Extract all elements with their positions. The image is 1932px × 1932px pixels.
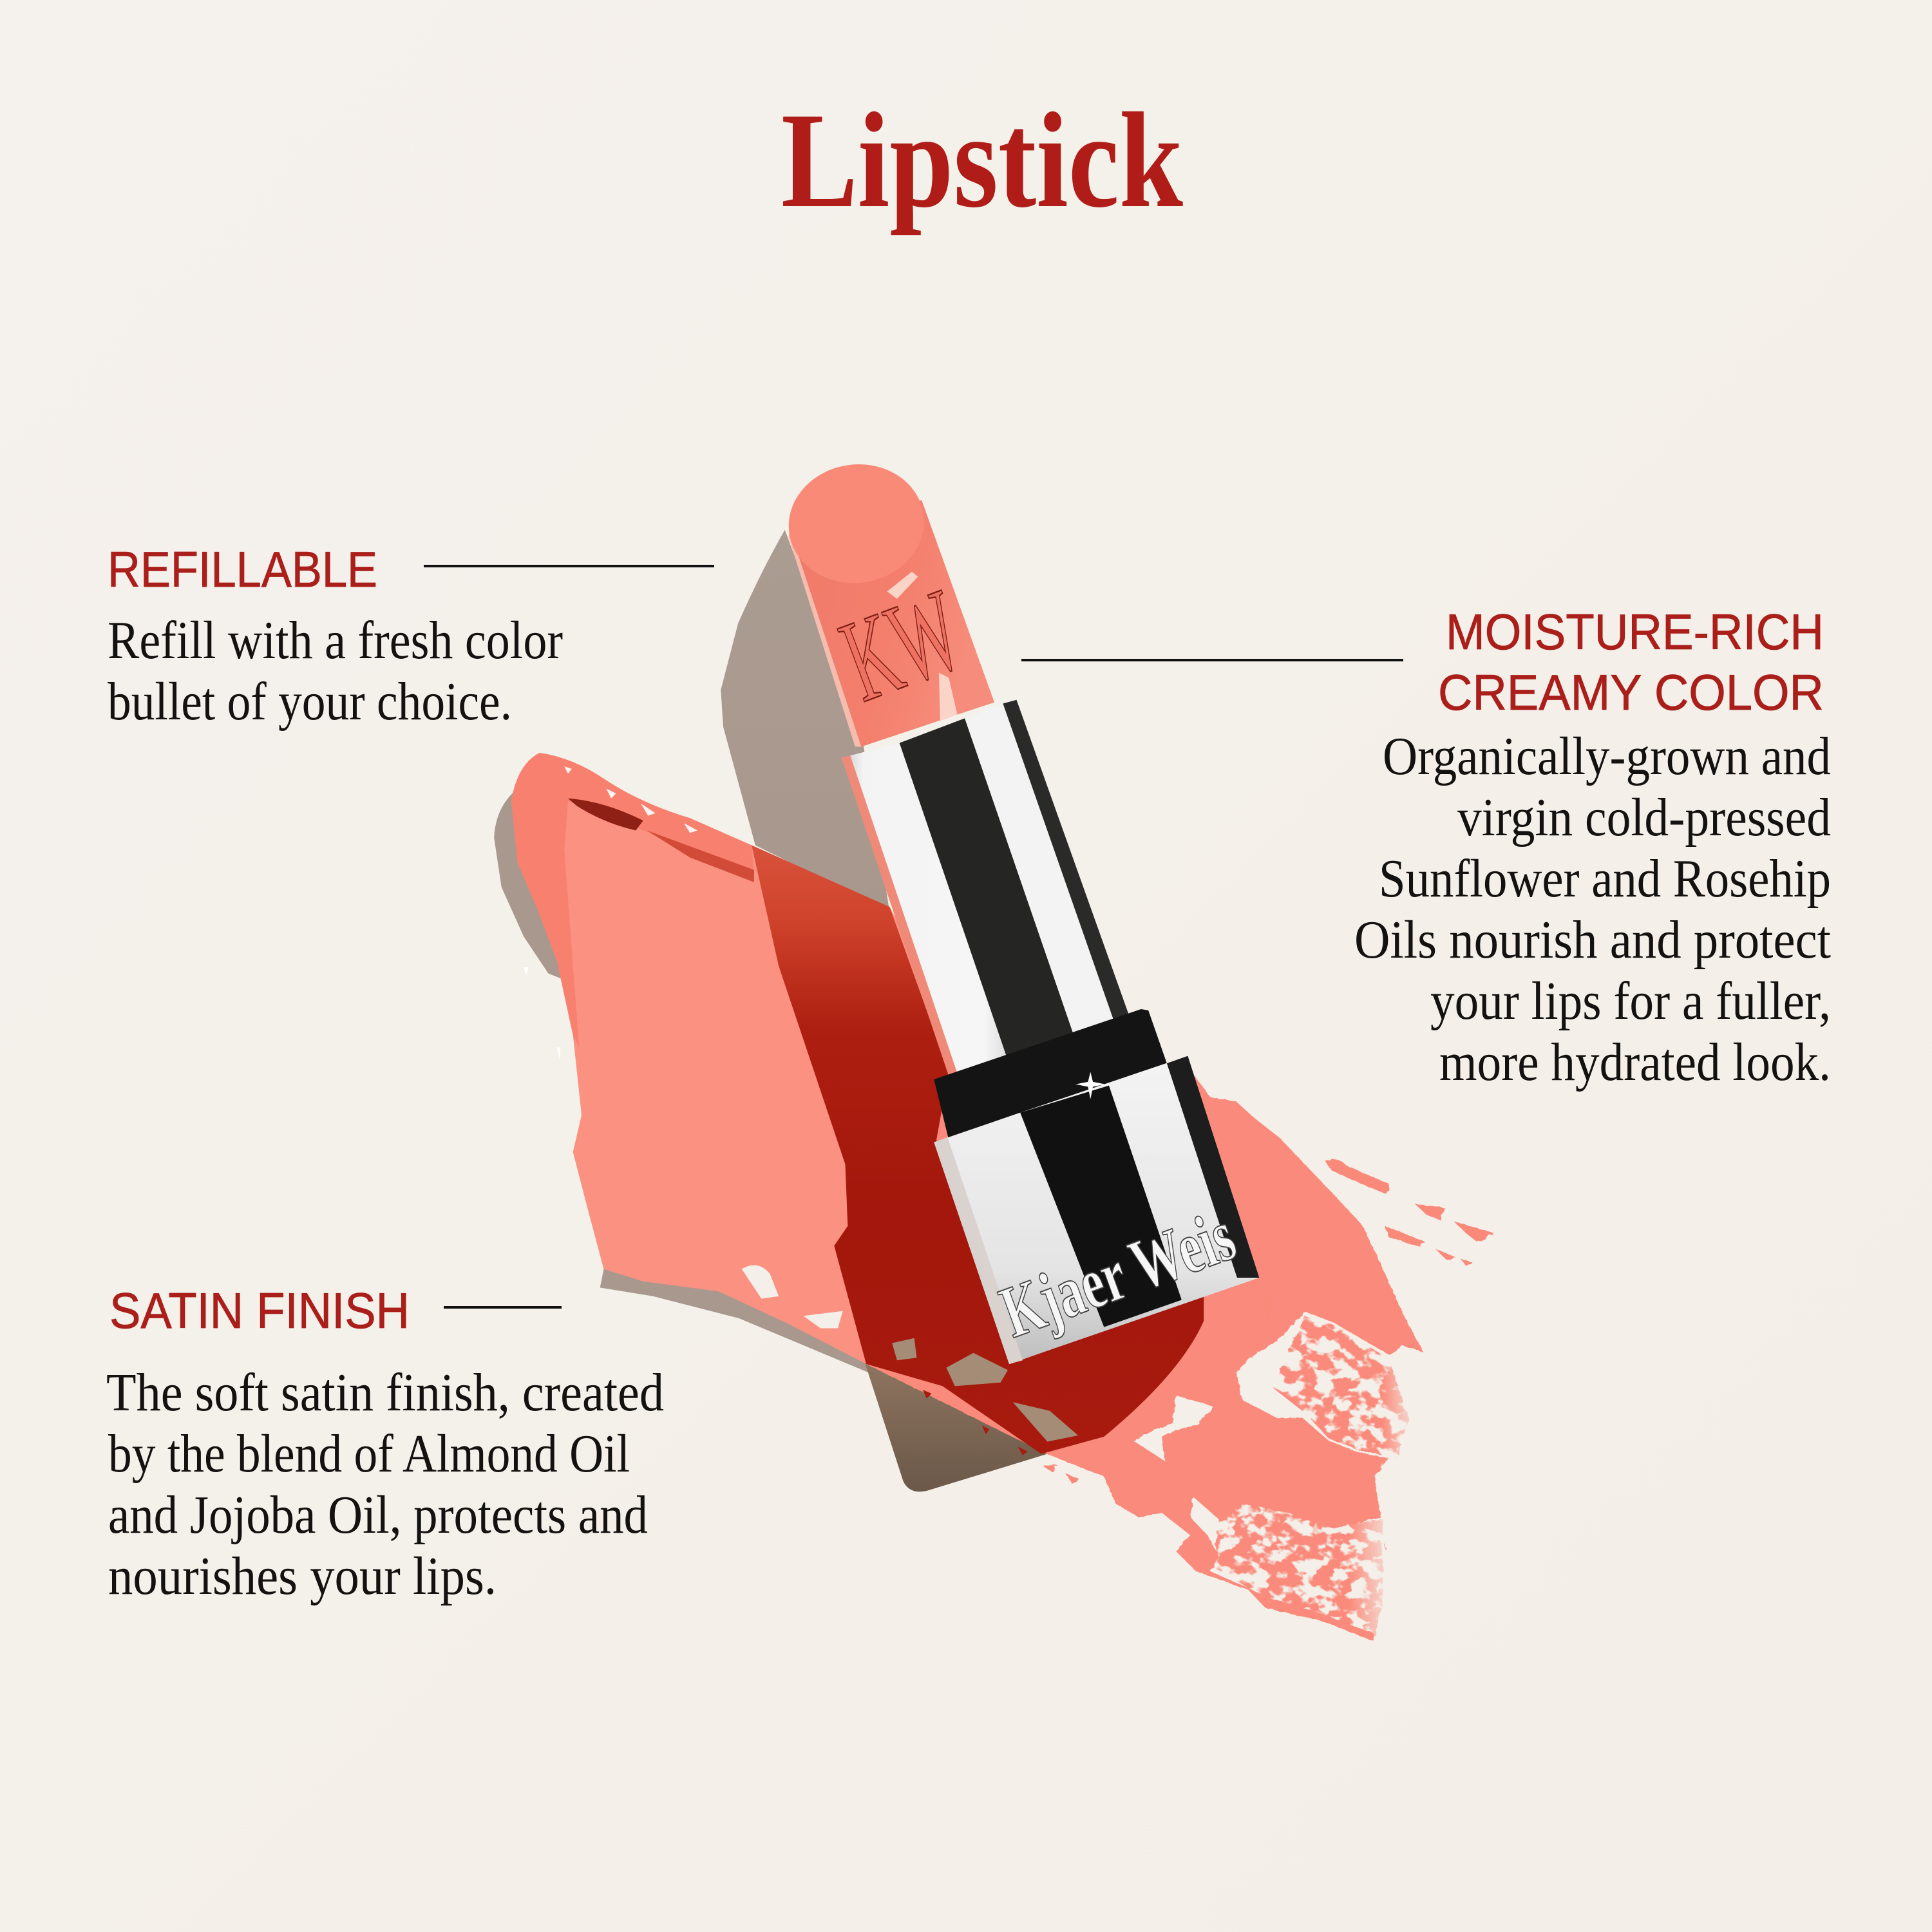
holes in shadow (892, 1338, 1078, 1442)
swatch: gloss streak (647, 831, 754, 882)
body text: virgin cold-pressed (1457, 788, 1831, 848)
swatch: glossy top ridge (511, 753, 754, 1047)
swatch: right smear (846, 1074, 1493, 1642)
body text: and Jojoba Oil, protects and (108, 1485, 648, 1545)
tube right silver (965, 703, 1119, 1066)
leader line (1021, 659, 1403, 661)
base right black edge (1167, 1056, 1259, 1278)
red specks on shadow (923, 1390, 1028, 1455)
lipstick shadow on swatch (752, 846, 1204, 1454)
tube black stripe (900, 718, 1084, 1097)
swatch: gloss glints (524, 766, 697, 1059)
title: Lipstick (781, 84, 1183, 236)
bullet left highlight (788, 530, 861, 746)
bullet (790, 500, 994, 746)
leader line (424, 565, 714, 567)
swatch holes (742, 1265, 1078, 1455)
body text: bullet of your choice. (108, 672, 512, 732)
base left silver tint (934, 1137, 1023, 1364)
body text: by the blend of Almond Oil (108, 1424, 630, 1484)
swatch rim shadow (494, 788, 887, 1372)
heading: MOISTURE-RICH (1446, 603, 1824, 660)
swatch: splatter (1044, 1159, 1493, 1484)
lipstick shadow on background, upper (721, 530, 889, 912)
bullet tip (781, 456, 932, 592)
heading: SATIN FINISH (109, 1282, 410, 1339)
swatch: broken upper patch (1236, 1312, 1417, 1461)
lipstick (781, 456, 1259, 1364)
bullet gloss (887, 572, 958, 721)
heading: REFILLABLE (108, 541, 377, 598)
swatch: upper patch crumbs (1274, 1316, 1409, 1459)
leader line (444, 1306, 562, 1309)
tube left silver (842, 743, 1020, 1109)
base (934, 1056, 1259, 1364)
body text: your lips for a fuller, (1430, 971, 1831, 1031)
bullet KW logo: KW (826, 564, 978, 726)
callout: moisture-rich (1021, 603, 1831, 1092)
swatch: lower patch crumbs (1213, 1504, 1383, 1639)
body text: Refill with a fresh color (108, 611, 563, 670)
tube right black (1003, 700, 1136, 1035)
hole in swatch bottom (803, 1311, 843, 1329)
product photo: lipstick on swatch (494, 456, 1493, 1642)
body text: Organically-grown and (1383, 726, 1831, 786)
tube edge (842, 755, 967, 1109)
lipstick shadow on background, lower (862, 1356, 1072, 1492)
base engraved brand: Kjaer Weis (990, 1194, 1245, 1353)
heading: CREAMY COLOR (1438, 664, 1824, 721)
base black stripe (1020, 1086, 1182, 1327)
callout: refillable (108, 541, 714, 732)
callout: satin finish (106, 1282, 664, 1606)
swatch: middle tear (1133, 1396, 1213, 1461)
swatch: lower broken patch (1190, 1497, 1388, 1634)
collar (934, 1009, 1167, 1140)
swatch: dark slit (568, 799, 643, 831)
body text: The soft satin finish, created (106, 1363, 664, 1423)
hole in swatch left (742, 1265, 779, 1299)
body text: more hydrated look. (1439, 1032, 1831, 1092)
body text: Oils nourish and protect (1354, 910, 1831, 970)
body text: nourishes your lips. (108, 1546, 497, 1606)
body text: Sunflower and Rosehip (1379, 849, 1831, 909)
swatch: left smear (511, 753, 1059, 1454)
collar glint (1075, 1072, 1105, 1099)
